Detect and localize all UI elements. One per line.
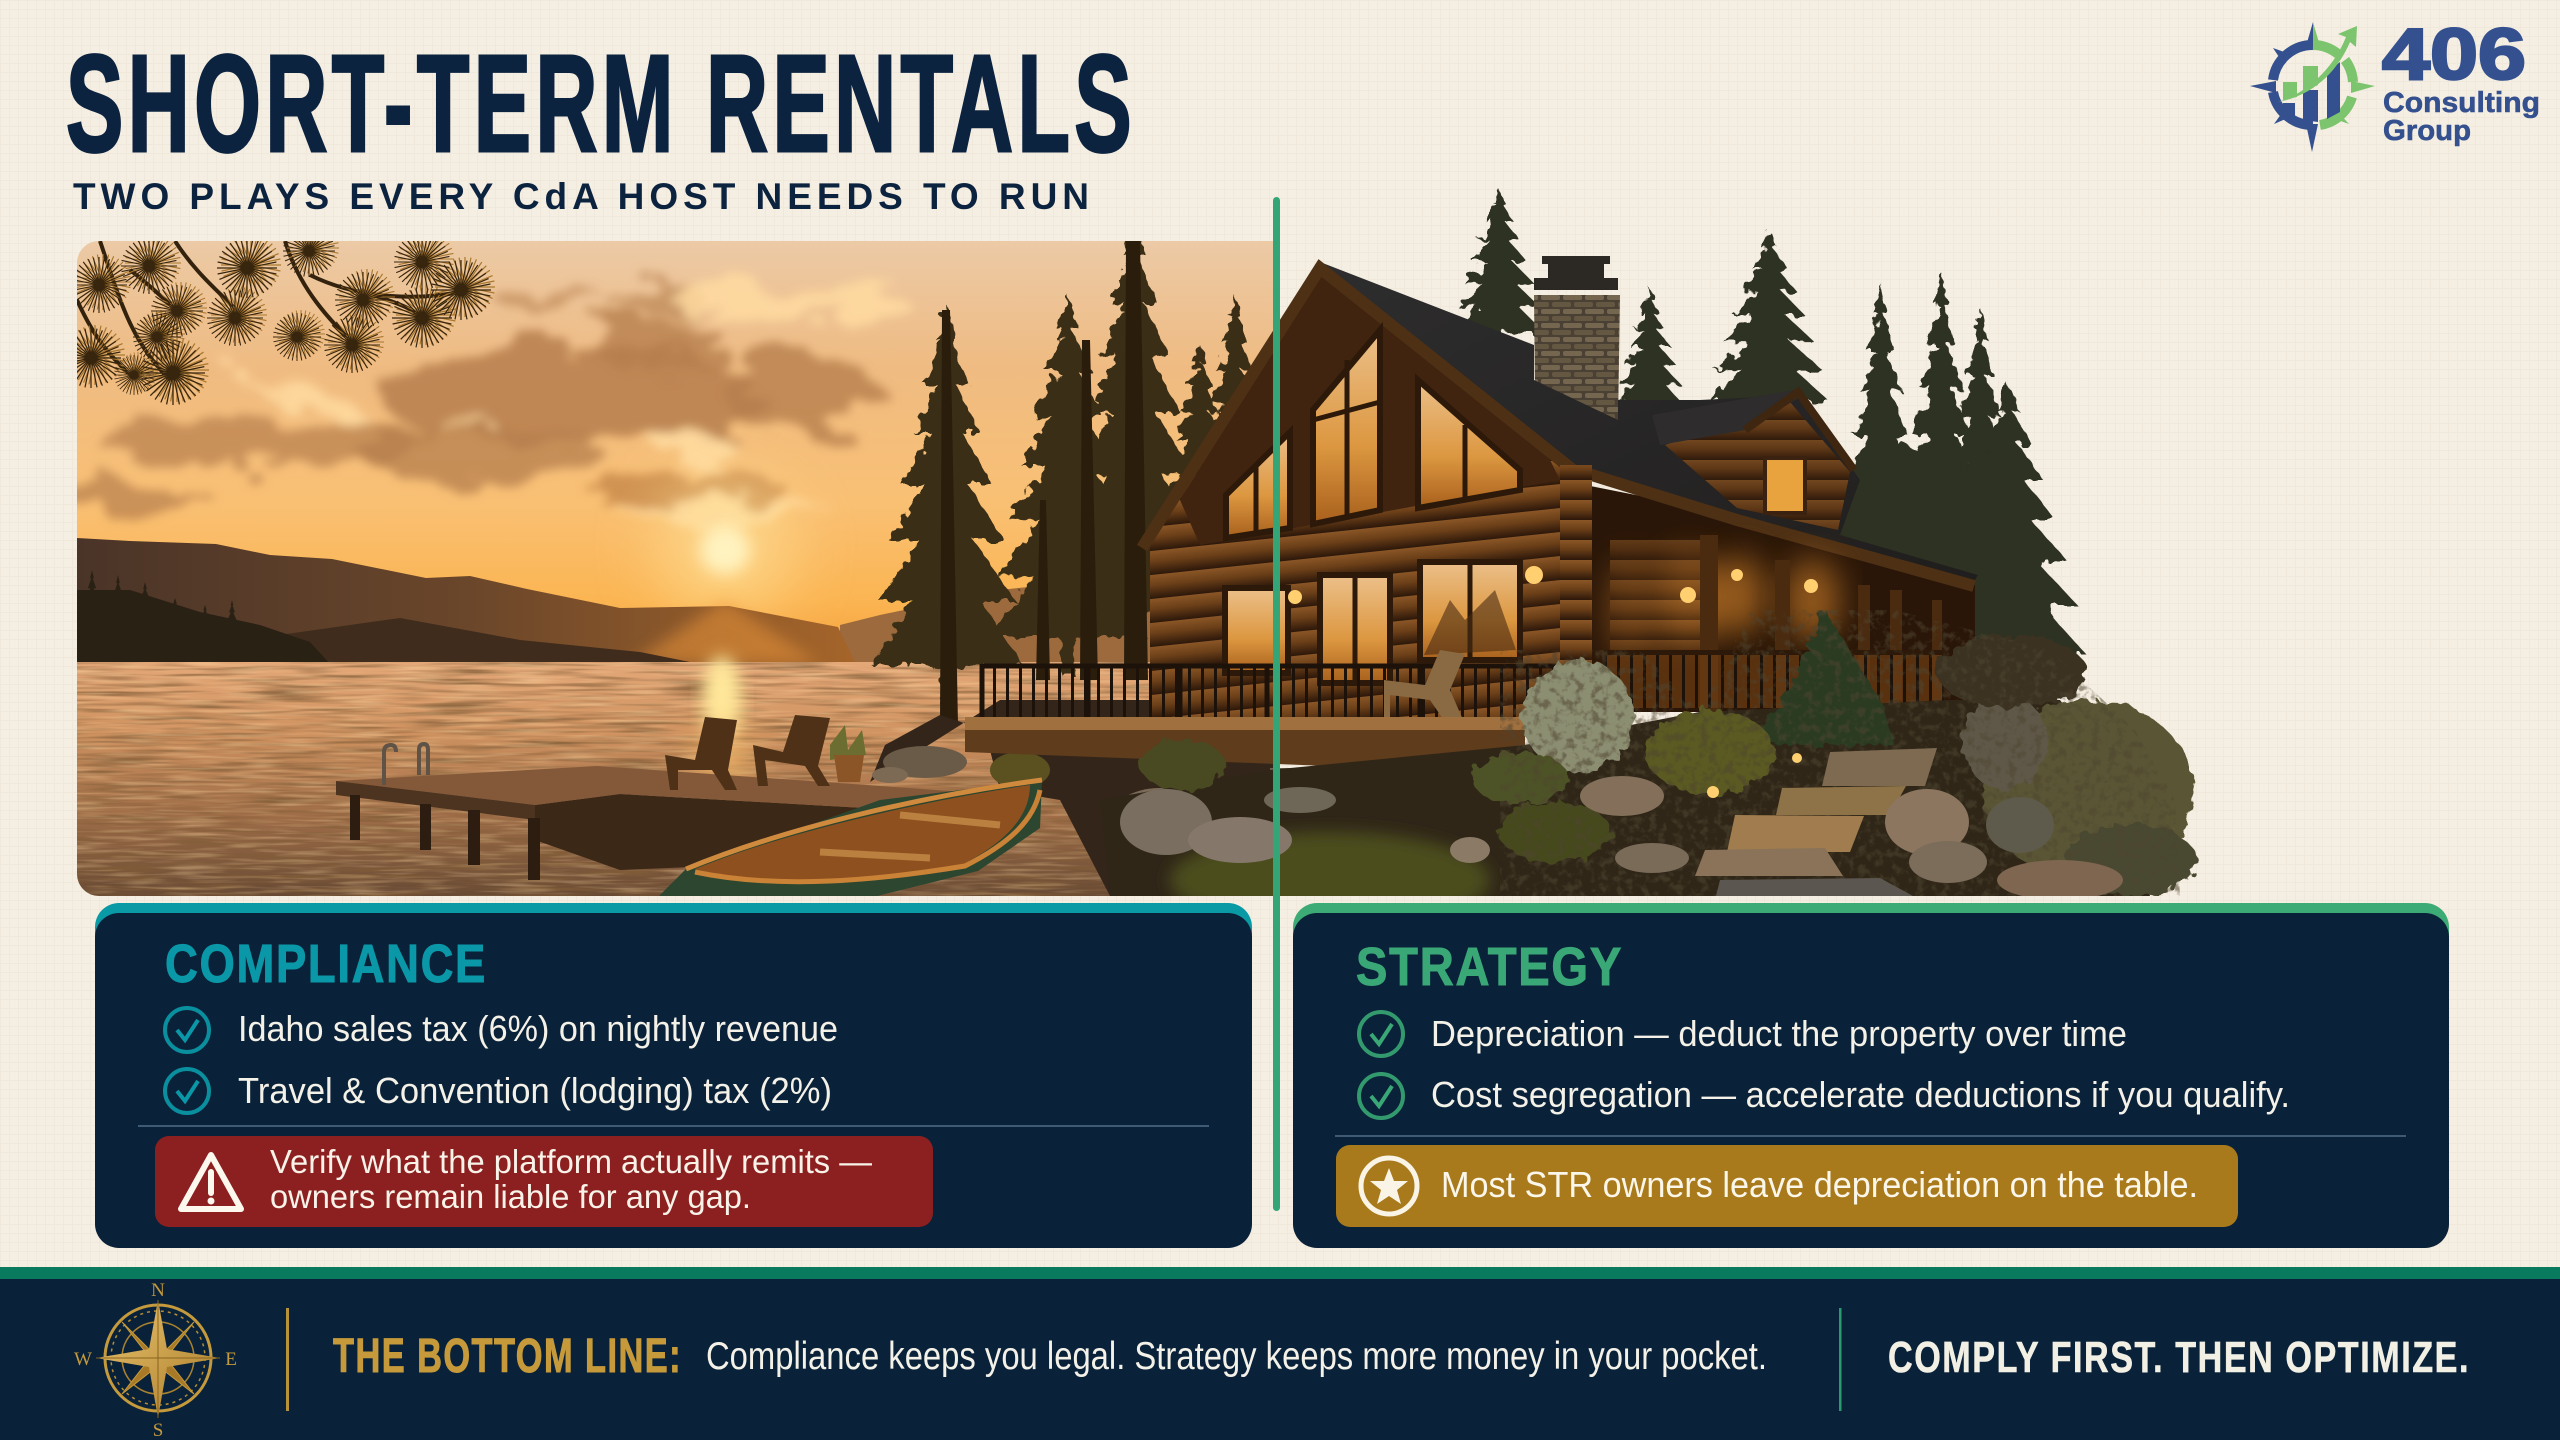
sun rays over ridge (630, 600, 820, 664)
deck chair and firepit (1344, 650, 1465, 739)
tip callout (1336, 1145, 2238, 1227)
branching pine needles, top left (77, 241, 495, 405)
icon: gold compass rose: E (225, 1349, 237, 1370)
warning text: Verify what the platform actually remits — (270, 1143, 872, 1180)
warning text line two: owners remain liable for any gap. (270, 1178, 751, 1215)
icon: star badge (1361, 1158, 1417, 1214)
porch posts (1700, 535, 1942, 712)
check item: sales tax: Idaho sales tax (6%) on nightly revenue (238, 1008, 838, 1049)
logo wordmark Consulting: Consulting (2383, 87, 2540, 119)
mountains (77, 538, 856, 664)
logo mark: compass with rising chart (2250, 22, 2375, 152)
forest shoreline (77, 570, 330, 666)
sky (77, 241, 1282, 666)
footer banner (0, 1267, 2560, 1440)
compliance heading: COMPLIANCE (165, 934, 487, 994)
grass (1166, 826, 1494, 896)
photo: sunset lake scene (61, 215, 1282, 896)
check item: depreciation: Depreciation — deduct the property over time (1431, 1013, 2127, 1054)
subtitle: TWO PLAYS EVERY CdA HOST NEEDS TO RUN (73, 176, 1089, 217)
check item: cost segregation: Cost segregation — accelerate deductions if you qualify. (1431, 1074, 2290, 1115)
logo: 406 Consulting Group (2250, 15, 2540, 152)
tip text: Most STR owners leave depreciation on the table. (1441, 1164, 2198, 1205)
roof fascia (1142, 268, 1974, 586)
deck railing (982, 664, 1557, 722)
check item: lodging tax: Travel & Convention (lodging) tax (2%) (238, 1070, 832, 1111)
title: SHORT-TERM RENTALS (66, 27, 1136, 181)
dormer (1652, 390, 1854, 530)
lower windows (1225, 562, 1520, 683)
potted plant (830, 725, 866, 782)
porch body (1560, 480, 1975, 712)
porch glow (1608, 555, 1840, 660)
porch railing (1604, 650, 1944, 708)
canoe (659, 780, 1042, 896)
distant right hill (840, 587, 1150, 662)
panel: compliance (95, 903, 1252, 1248)
clouds (65, 282, 910, 520)
far pine trees (872, 241, 1251, 704)
window reflections (1424, 590, 1516, 655)
shore rocks and brush (870, 700, 1278, 896)
panel body (1293, 913, 2449, 1248)
strategy heading: STRATEGY (1356, 937, 1623, 997)
center divider (1273, 197, 1280, 1211)
corner log ends (1560, 465, 1592, 712)
shoreline boulders (1128, 788, 1164, 795)
upper gable dark wood (1180, 275, 1560, 545)
logo wordmark Group: Group (2383, 115, 2471, 147)
garden foreground (1108, 610, 2199, 896)
stone steps (1695, 748, 1937, 896)
icon: warning triangle (181, 1155, 241, 1209)
icon: gold compass rose: N (151, 1280, 165, 1301)
icon: gold compass rose: W (74, 1349, 92, 1370)
icon: gold compass rose (74, 1280, 237, 1440)
cabin (965, 256, 1978, 825)
lower forested ridge (287, 618, 690, 662)
panel accent top (1293, 903, 2449, 963)
chimney (1534, 256, 1620, 425)
dock (336, 744, 994, 880)
main gable log wall (1150, 275, 1575, 722)
sun (655, 478, 795, 618)
garden path lamps (1707, 753, 1802, 798)
shrubs (1141, 607, 2196, 896)
panel: strategy (1293, 903, 2449, 1248)
roof (1320, 262, 1978, 588)
upper windows (1226, 330, 1520, 538)
ground (1100, 700, 2150, 896)
logo wordmark 406: 406 (2382, 15, 2526, 95)
foliage speckle texture (1500, 600, 2200, 896)
porch door and logs (1610, 540, 1700, 655)
lanterns (1288, 566, 1818, 604)
panel body (95, 913, 1252, 1248)
panel accent top (95, 903, 1252, 963)
boulders (1120, 776, 2123, 900)
back forest behind cabin (1453, 189, 2086, 700)
lake water (77, 656, 1282, 896)
adirondack chairs (665, 715, 830, 790)
deck (965, 717, 1525, 825)
warning callout (155, 1136, 933, 1227)
bottom line message: Compliance keeps you legal. Strategy keeps more money in your pocket. (706, 1335, 1767, 1378)
pine trunks (940, 241, 1148, 725)
bottom line label: THE BOTTOM LINE: (333, 1330, 682, 1383)
